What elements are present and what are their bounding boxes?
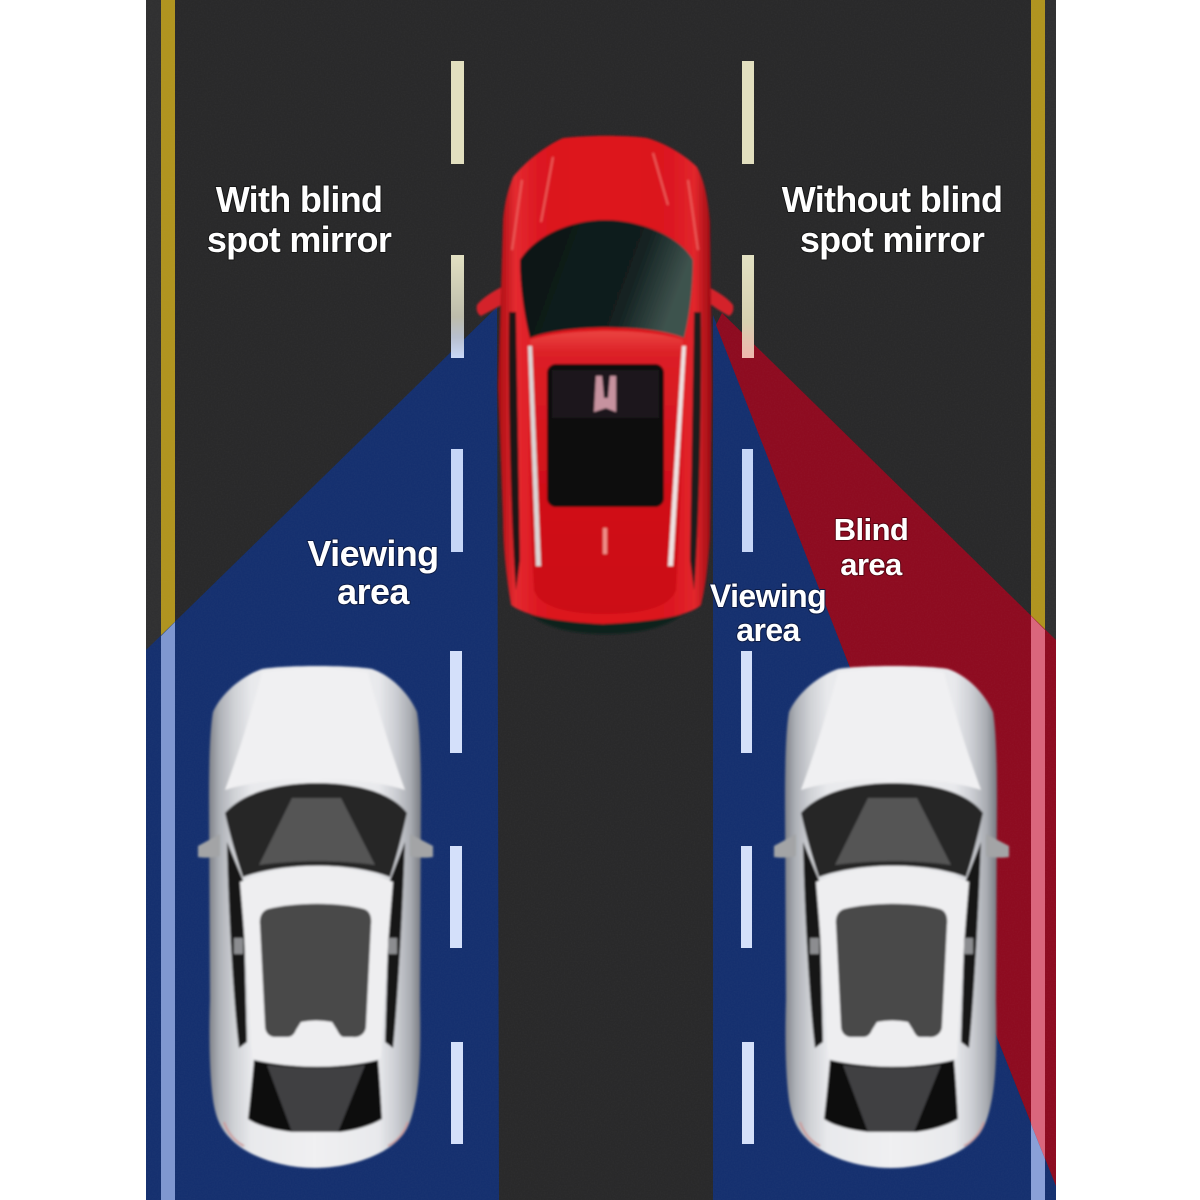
- windshield: [520, 220, 693, 338]
- label: left viewing area: Viewing: [307, 533, 439, 574]
- sunroof reflection: [594, 376, 616, 412]
- rear badge: [603, 528, 607, 554]
- heading: without blind spot mirror: Without blind: [782, 179, 1002, 220]
- label: right viewing area: area: [736, 612, 801, 648]
- white car, right: [774, 666, 1009, 1168]
- right lane dashes: [741, 61, 754, 1144]
- sunroof: [547, 364, 664, 507]
- roof and rear deck: [529, 331, 683, 614]
- left viewing area: blue cone: [146, 307, 499, 1200]
- roof rails: [528, 346, 541, 566]
- right edge line: lit red section: [1031, 616, 1045, 1159]
- label: blind area: Blind: [834, 512, 908, 547]
- heading: without blind spot mirror: spot mirror: [800, 219, 985, 260]
- side windows: [509, 312, 520, 590]
- left lane dashes: [450, 61, 464, 1144]
- label: left viewing area: area: [337, 571, 410, 612]
- heading: with blind spot mirror: With blind: [216, 179, 382, 220]
- right road edge line: yellow: [1031, 0, 1045, 640]
- right viewing area: blue cone: [713, 315, 1056, 1200]
- heading: with blind spot mirror: spot mirror: [207, 219, 392, 260]
- label: right viewing area: Viewing: [710, 578, 826, 614]
- body: [498, 136, 712, 624]
- right edge line: lit blue section: [1031, 1124, 1045, 1200]
- right blind area: red cone: [716, 313, 1056, 1186]
- red car, top view: [477, 136, 733, 634]
- hood creases: [512, 153, 698, 250]
- asphalt outer shoulders: [146, 0, 1056, 1200]
- label: blind area: area: [840, 547, 903, 582]
- rear bumper shadow: [518, 598, 694, 634]
- white car, left: [198, 666, 433, 1168]
- left road edge line: yellow: [161, 0, 175, 640]
- mirrors: [477, 286, 506, 316]
- asphalt grain: [146, 0, 1056, 1200]
- left edge line: lit section: [161, 622, 175, 1200]
- asphalt road background: [146, 0, 1056, 1200]
